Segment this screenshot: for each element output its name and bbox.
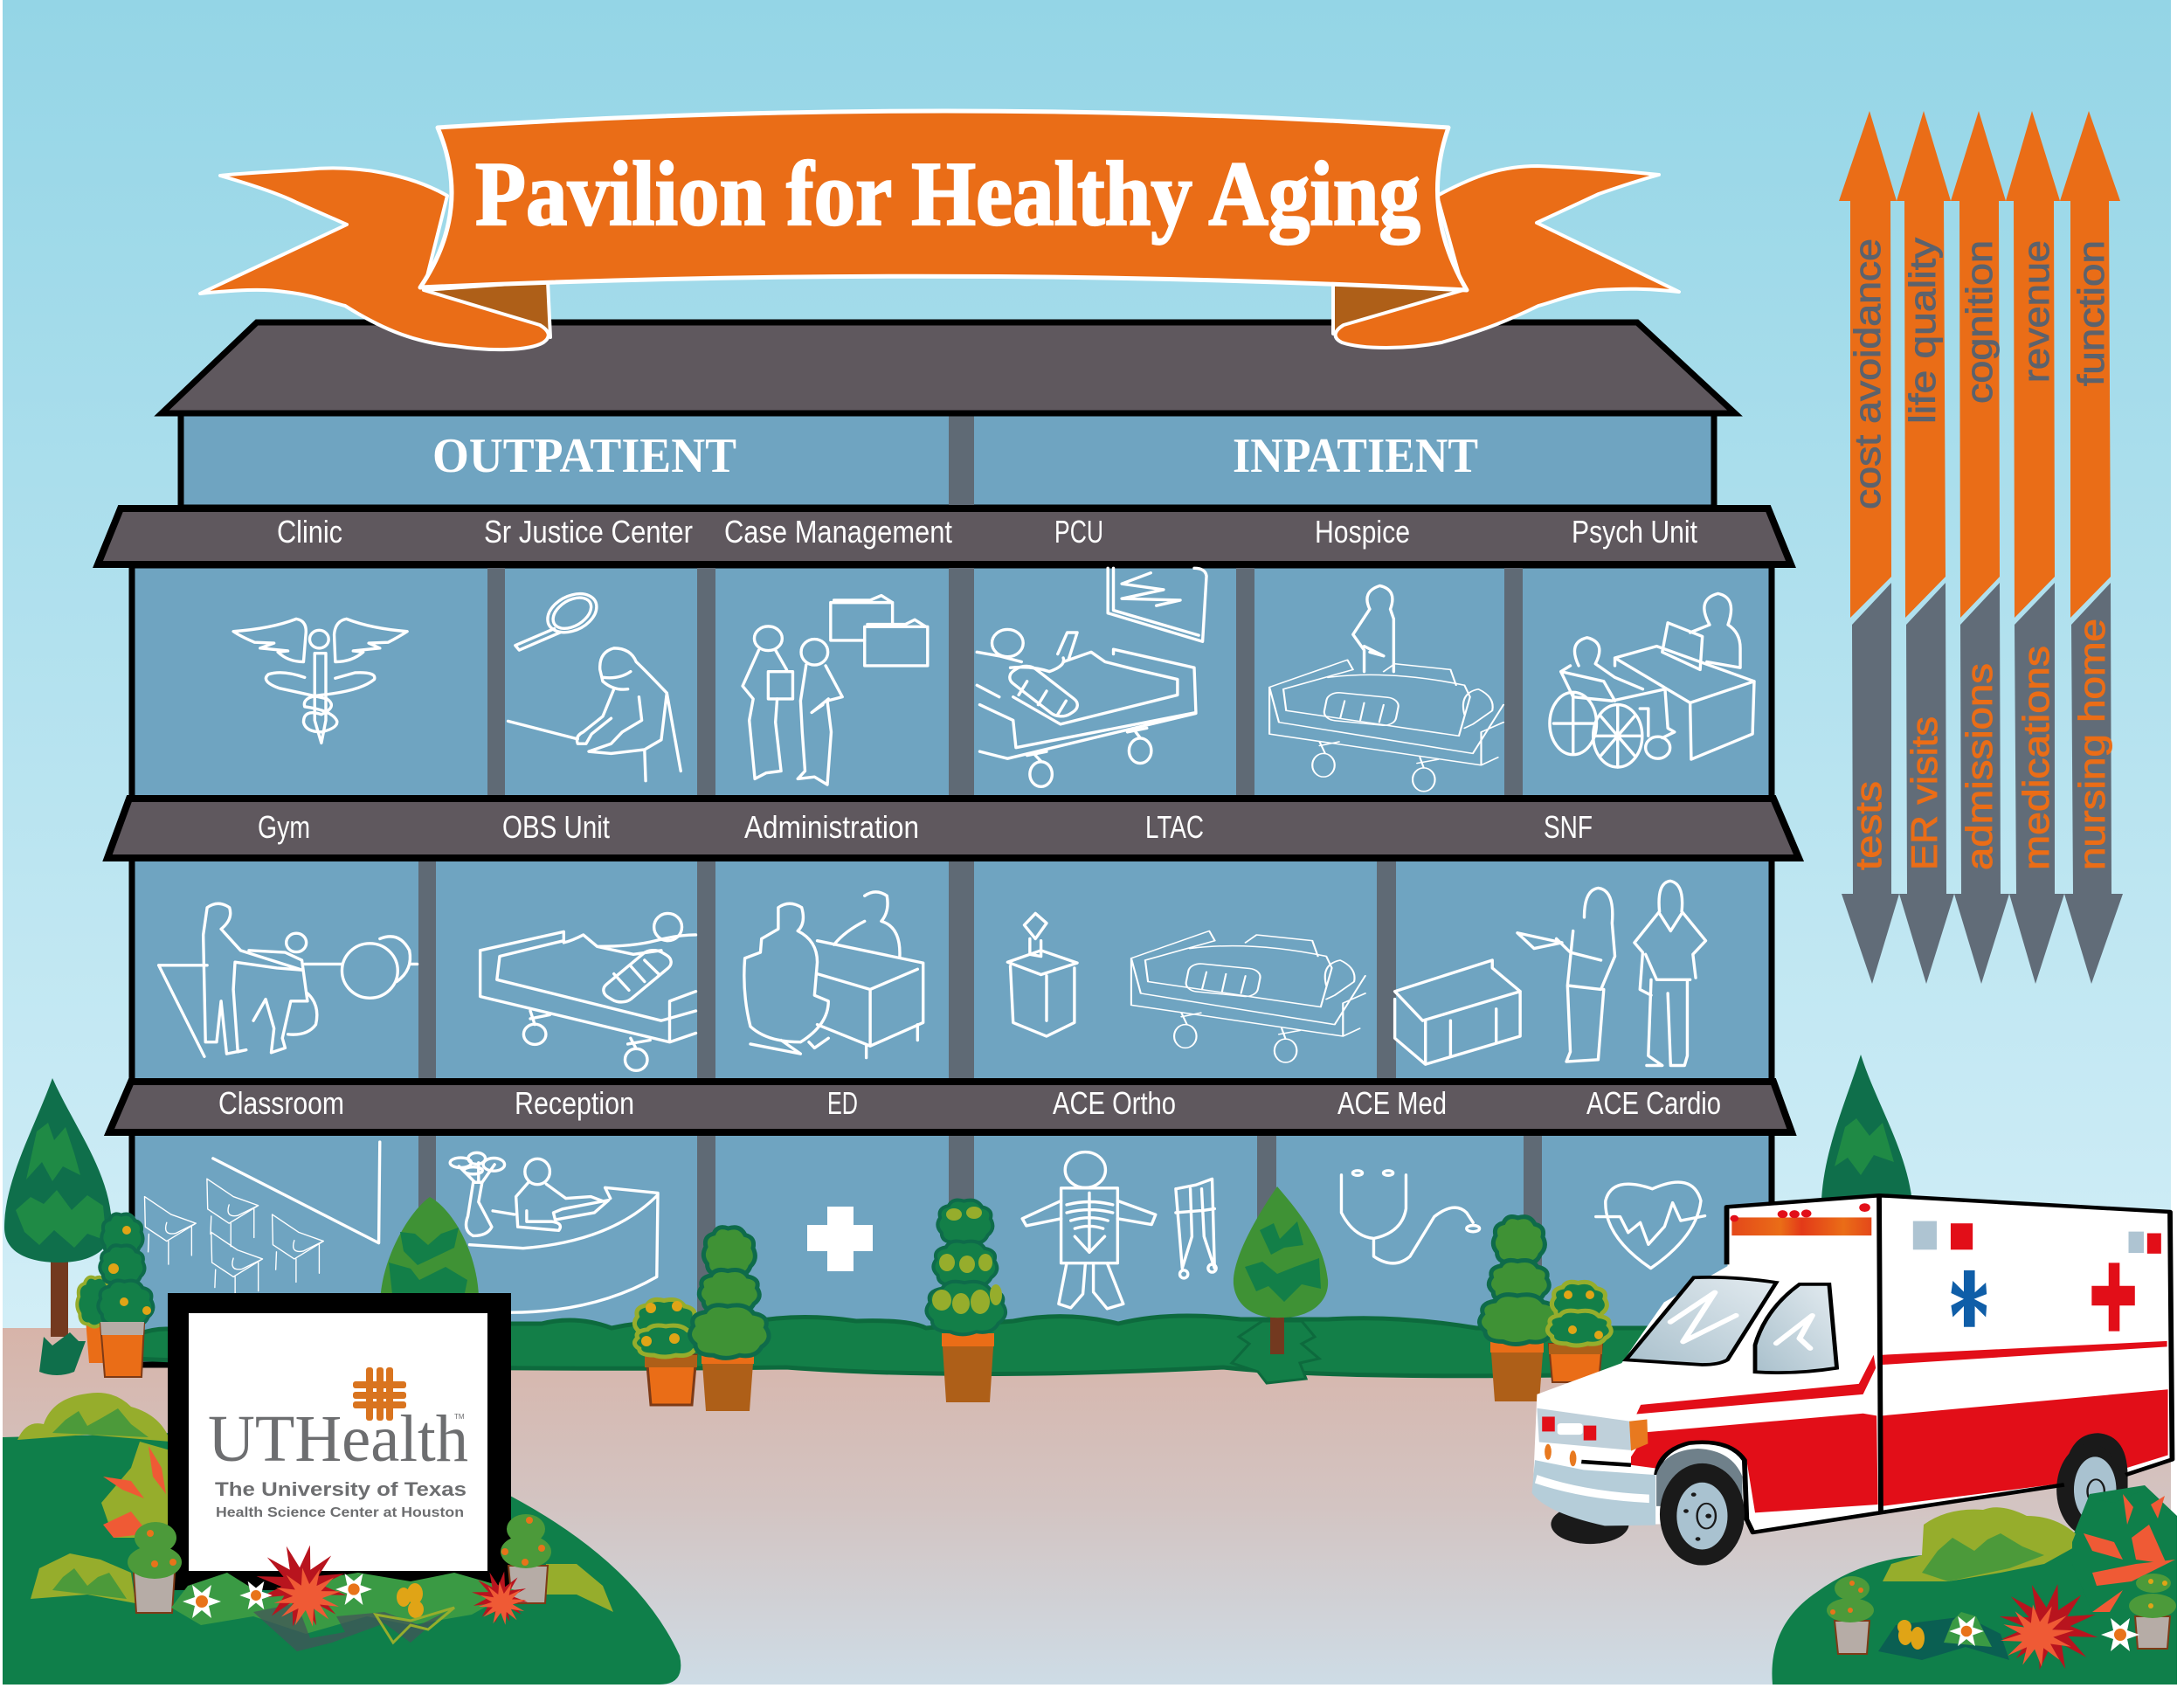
room labels: Reception [515,1085,634,1121]
up labels [1847,238,2111,509]
hedge [131,1316,1660,1376]
room labels: ACE Med [1337,1085,1447,1121]
tree behind sign [380,1197,479,1306]
planter: yellow-dot bush, right [1547,1282,1611,1382]
up labels: function [2070,240,2111,386]
sign with UTHealth logo [168,1293,511,1590]
banner [200,111,1679,349]
icon: heart with ECG line [1596,1182,1705,1269]
title: Pavilion for Healthy Aging [475,142,1420,245]
column dividers [418,416,1542,1352]
background tree, left [4,1078,112,1375]
side window [1755,1284,1837,1373]
icons: left upper floors [159,587,928,1070]
windshield [1626,1277,1776,1365]
rear wheel and arch [2056,1433,2128,1536]
heading: OUTPATIENT: OUTPATIENT [432,429,736,483]
potted plant, left [128,1522,182,1613]
room labels: ACE Ortho [1053,1085,1176,1121]
room labels: SNF [1544,809,1593,845]
red cross [2091,1263,2135,1332]
room labels: Gym [258,809,310,845]
planter: left topiary group [77,1214,153,1377]
icon: ED white cross [807,1207,873,1271]
icon: PCU patient with monitor [977,568,1206,786]
room labels: PCU [1054,514,1103,550]
ground / plaza [3,1328,2171,1685]
room labels: LTAC [1145,809,1204,845]
fold, right [1333,281,1463,334]
room labels: OBS Unit [502,809,610,845]
icon: case managers and folders [743,596,928,785]
up labels: cost avoidance [1847,239,1888,509]
icon: x-ray skeleton and crutches [1022,1152,1216,1309]
down labels: admissions [1959,663,2000,870]
logo: center name: Health Science Center at Houston [216,1505,464,1520]
icon: caduceus [233,619,407,743]
planter: three-ball topiary, left [690,1228,769,1411]
ambulance [1532,1195,2172,1566]
arrows pointing down [1842,583,2123,984]
icon: wheelchair consultation [1550,593,1754,767]
planter: yellow-dot bush, left [634,1299,700,1405]
ribbon tail, right [1336,166,1679,348]
icon: SNF cabinet and clinicians [1395,881,1706,1066]
logo: woven mark [353,1367,406,1421]
room labels: Classroom [218,1085,344,1121]
down labels: tests [1848,781,1889,870]
up labels: cognition [1959,240,2000,404]
room labels [218,514,1721,1121]
roof light bar [1731,1217,1871,1235]
icon: classroom chairs [145,1142,380,1300]
heading: INPATIENT: INPATIENT [1233,429,1478,483]
down labels: medications [2015,646,2056,870]
centre tree [1232,1186,1328,1383]
room labels: Administration [744,809,919,845]
icon: hospice bed with visitor [1269,585,1503,792]
potted plant, right [501,1514,551,1603]
ribbon centre [420,111,1467,290]
logo: university name: The University of Texas [215,1478,467,1500]
lower red panel: box [1882,1389,2168,1506]
bumper [1532,1460,1655,1525]
icon: administration meeting [744,892,923,1058]
roof [162,322,1735,413]
fold, left [424,281,550,337]
outcome arrows [1839,111,2123,984]
room labels: Sr Justice Center [484,514,693,550]
lower red panel: cab [1631,1414,1878,1512]
potted plant left [1827,1576,1874,1654]
floor band 2 [107,799,1799,858]
room labels: ED [827,1085,858,1121]
left lawn [3,1433,681,1685]
icon: gym therapy [159,903,418,1056]
sky background [3,0,2171,1335]
building [98,322,1799,1365]
background tree, right [1821,1055,1913,1223]
top floor wall [181,413,1714,508]
room labels: ACE Cardio [1586,1085,1721,1121]
down labels: nursing home [2071,619,2112,870]
logo: trademark: TM [454,1413,465,1421]
icon: OBS hospital bed [480,913,695,1070]
icon: reception desk [450,1152,658,1312]
down labels: ER visits [1904,716,1945,870]
floor band 1 [98,508,1791,564]
red-leaved plant [2072,1490,2177,1612]
lime shrub [1883,1507,2084,1581]
flower bed under sign [128,1514,551,1651]
side windows markers [1913,1221,2161,1254]
shrubs on left lawn [17,1393,613,1612]
body shell [1533,1195,2171,1532]
front underside tire [1551,1505,1629,1544]
potted plant right [2129,1574,2176,1649]
floor band 3 [109,1082,1792,1132]
grille and lights [1537,1408,1648,1466]
room labels: Case Management [724,514,952,550]
room labels: Psych Unit [1572,514,1697,550]
front wheel [1656,1449,1745,1566]
icons: ground floor right [1022,1152,1705,1309]
icon: stethoscope [1341,1171,1480,1263]
down labels [1848,619,2112,870]
logo: UTHealth wordmark: UTHealth [208,1402,468,1476]
icon: magnifying glass and justice-center worker [508,587,681,781]
icons: ground floor left [145,1142,658,1312]
room labels: Clinic [277,514,342,550]
up labels: revenue [2015,240,2056,383]
icon: LTAC bedside table and bed [1007,913,1365,1062]
star of life [1951,1270,1987,1327]
body outline [1581,1195,2172,1532]
arrows pointing up [1839,111,2120,618]
planter: centre topiary [927,1200,1006,1402]
ground floor and upper floors wall [132,565,1772,1365]
right lawn plants [1827,1490,2177,1680]
window glare [1670,1292,1812,1348]
red stripes [1636,1341,2167,1414]
sign frame [168,1293,511,1590]
roof lights [1730,1203,1870,1221]
planter: right three-ball topiary [1480,1217,1559,1401]
up labels: life quality [1902,238,1943,424]
sign face [189,1313,487,1571]
icons: right upper floors [977,568,1754,1066]
ribbon tail, left [200,168,549,349]
room labels: Hospice [1315,514,1410,550]
right lawn [1772,1485,2177,1685]
